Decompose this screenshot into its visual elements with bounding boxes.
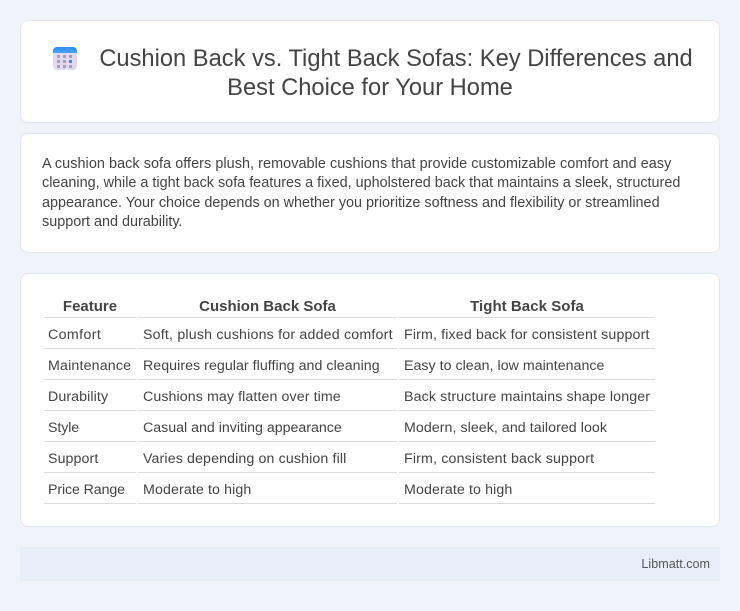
row: price range: Price Range: [48, 482, 125, 498]
panel: introduction: [20, 133, 720, 253]
row: support: Firm, consistent back support: [404, 451, 594, 467]
title: [99, 46, 693, 101]
comparison table: [44, 298, 655, 504]
row: comfort: Firm, fixed back for consistent support: [404, 327, 650, 343]
row: durability: [44, 389, 655, 411]
footer bar: [20, 547, 720, 581]
row: price range: Moderate to high: [143, 482, 251, 498]
title: Cushion Back vs. Tight Back Sofas: Key Differences and: [99, 46, 693, 72]
row: support: Varies depending on cushion fill: [143, 451, 346, 467]
row: support: [44, 451, 655, 473]
row: price range: [44, 482, 655, 504]
footer credit: Libmatt.com: [641, 557, 710, 571]
text block: introduction: cleaning, while a tight back sofa features a fixed, upholstered back that maintains a sleek, structured: [42, 175, 680, 191]
row: maintenance: Requires regular fluffing and cleaning: [143, 358, 380, 374]
icon: calendar grid: [53, 47, 77, 70]
row: comfort: Comfort: [48, 327, 101, 343]
row: durability: Durability: [48, 389, 108, 405]
row: comfort: [44, 327, 655, 349]
text block: introduction: A cushion back sofa offers plush, removable cushions that provide customizable comfort and easy: [42, 156, 671, 172]
row: maintenance: Maintenance: [48, 358, 131, 374]
row: style: Style: [48, 420, 79, 436]
table header: [44, 298, 655, 318]
text block: introduction: [42, 156, 680, 230]
row: durability: Cushions may flatten over time: [143, 389, 341, 405]
row: style: Modern, sleek, and tailored look: [404, 420, 607, 436]
panel: title card: [20, 20, 720, 123]
row: comfort: Soft, plush cushions for added comfort: [143, 327, 393, 343]
row: style: Casual and inviting appearance: [143, 420, 342, 436]
text block: introduction: support and durability.: [42, 214, 183, 230]
row: price range: Moderate to high: [404, 482, 512, 498]
table header: Cushion Back Sofa: [199, 298, 336, 315]
row: durability: Back structure maintains shape longer: [404, 389, 650, 405]
row: maintenance: Easy to clean, low maintenance: [404, 358, 604, 374]
table header: Feature: [63, 298, 117, 315]
text block: introduction: appearance. Your choice depends on whether you prioritize softness and flexibility or streamlined: [42, 195, 660, 211]
panel: comparison table card: [20, 273, 720, 527]
row: support: Support: [48, 451, 98, 467]
table header: Tight Back Sofa: [470, 298, 584, 315]
row: maintenance: [44, 358, 655, 380]
row: style: [44, 420, 655, 442]
title: Best Choice for Your Home: [227, 75, 513, 101]
